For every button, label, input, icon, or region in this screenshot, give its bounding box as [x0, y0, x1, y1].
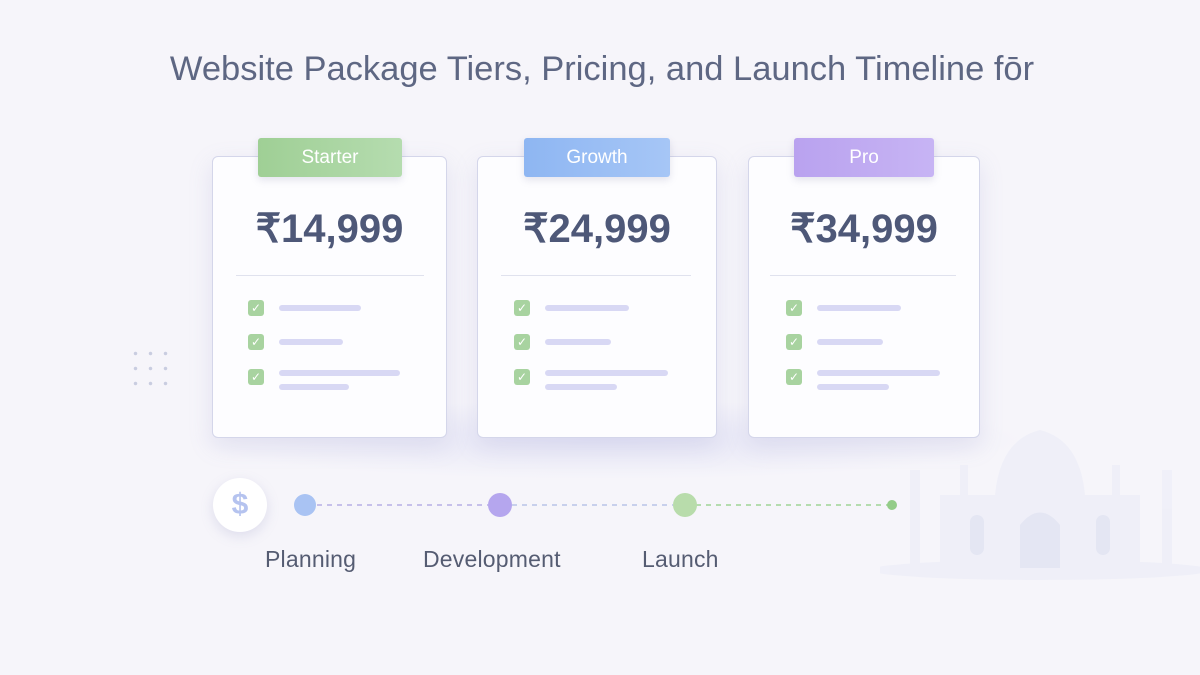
panel: pro card	[744, 138, 984, 450]
panel: growth card	[474, 138, 720, 448]
node: end	[887, 500, 897, 510]
label: Launch: Launch	[642, 546, 719, 572]
tab: Starter	[258, 138, 402, 177]
label: Development: Development	[423, 546, 561, 572]
tab: Growth: Growth	[566, 147, 628, 168]
icon: dollar coin: $	[232, 488, 248, 521]
feature list	[786, 300, 940, 390]
label: Planning: Planning	[265, 546, 356, 572]
icon: dollar coin	[213, 478, 267, 532]
node: development	[488, 493, 512, 517]
feature list: ✓	[789, 335, 799, 349]
feature list: ✓	[251, 335, 261, 349]
tab: Pro	[794, 138, 934, 177]
tab: Pro: Pro	[849, 147, 879, 168]
price: ₹14,999	[256, 207, 403, 251]
price: ₹24,999	[523, 207, 671, 251]
feature list: ✓	[789, 370, 799, 384]
decorative dots	[128, 346, 174, 392]
title: Website Package Tiers, Pricing, and Launch Timeline fōr	[170, 50, 1034, 88]
feature list	[514, 300, 668, 390]
icon: taj mahal silhouette	[970, 512, 1110, 568]
feature list: ✓	[251, 301, 261, 315]
feature list: ✓	[251, 370, 261, 384]
panel: starter card	[208, 138, 450, 450]
node: planning	[294, 494, 316, 516]
tab: Starter: Starter	[301, 147, 359, 168]
price: ₹34,999	[790, 207, 938, 251]
feature list: ✓	[517, 335, 527, 349]
feature list: ✓	[517, 370, 527, 384]
feature list	[248, 300, 400, 390]
feature list: ✓	[517, 301, 527, 315]
node: launch	[673, 493, 697, 517]
background glow	[180, 400, 1030, 480]
tab: Growth	[524, 138, 670, 177]
timeline	[210, 478, 897, 538]
feature list: ✓	[789, 301, 799, 315]
